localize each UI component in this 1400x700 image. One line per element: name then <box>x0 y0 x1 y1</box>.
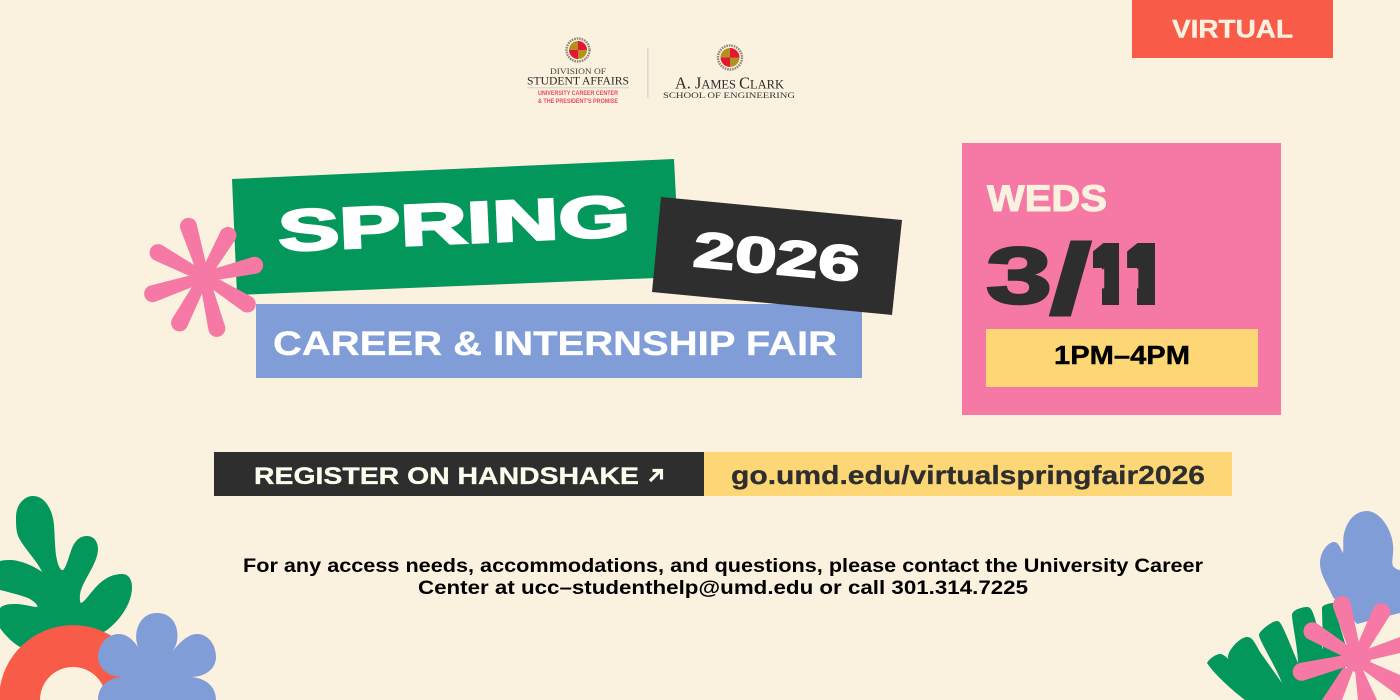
banner: 2026 <box>652 197 902 315</box>
text: access note <box>243 555 1203 599</box>
time box: 1PM–4PM <box>1054 340 1190 370</box>
text: access note: For any access needs, accommodations, and questions, please contact the University Career <box>243 555 1203 577</box>
icon: red ring <box>0 625 147 700</box>
link: registration url <box>704 452 1232 496</box>
text: access note: Center at ucc–studenthelp@umd.edu or call 301.314.7225 <box>418 577 1028 599</box>
text: date <box>986 240 1155 316</box>
banner: career and internship fair <box>256 304 862 378</box>
call to action: register on handshake <box>214 452 704 496</box>
logo: division of student affairs: DIVISION OF <box>550 66 606 76</box>
logo: clark school of engineering: A. JAMES CLARK <box>675 74 785 92</box>
logo: division of student affairs <box>527 38 629 105</box>
decoration: bottom right plants <box>1207 511 1400 700</box>
text: date: 3 <box>986 231 1052 320</box>
logo: clark school of engineering <box>663 46 795 100</box>
icon: blue flower <box>98 613 216 700</box>
logo: division of student affairs: UNIVERSITY CAREER CENTER <box>538 90 618 97</box>
banner: spring: SPRING <box>277 184 631 264</box>
logo: clark school of engineering: SCHOOL OF ENGINEERING <box>663 90 795 100</box>
icon: blue leaf <box>1320 511 1400 624</box>
icon: green palm leaf <box>1207 603 1347 700</box>
text: date: 11 <box>1094 228 1166 322</box>
icon: pink asterisk right <box>1291 594 1400 700</box>
call to action: register on handshake: REGISTER ON HANDSHAKE <box>254 463 639 490</box>
icon: arrow <box>650 470 662 481</box>
decoration: bottom left plants <box>0 496 216 700</box>
logos: university partners <box>527 38 795 105</box>
banner: career and internship fair: CAREER & INTERNSHIP FAIR <box>273 325 837 363</box>
logo: division of student affairs: STUDENT AFFAIRS <box>527 74 629 88</box>
logo: division of student affairs: & THE PRESIDENT'S PROMISE <box>538 98 619 105</box>
banner: spring <box>232 159 680 295</box>
badge: virtual <box>1132 0 1333 58</box>
time box <box>986 329 1258 387</box>
text: date: / <box>1050 224 1091 334</box>
link: registration url: go.umd.edu/virtualspringfair2026 <box>731 460 1205 490</box>
icon: pink asterisk left <box>142 216 265 339</box>
icon: green leaf <box>0 496 132 660</box>
banner: 2026: 2026 <box>691 221 862 293</box>
badge: virtual: VIRTUAL <box>1172 16 1293 44</box>
text: weekday: WEDS <box>987 178 1107 219</box>
panel: date and time <box>962 143 1281 415</box>
